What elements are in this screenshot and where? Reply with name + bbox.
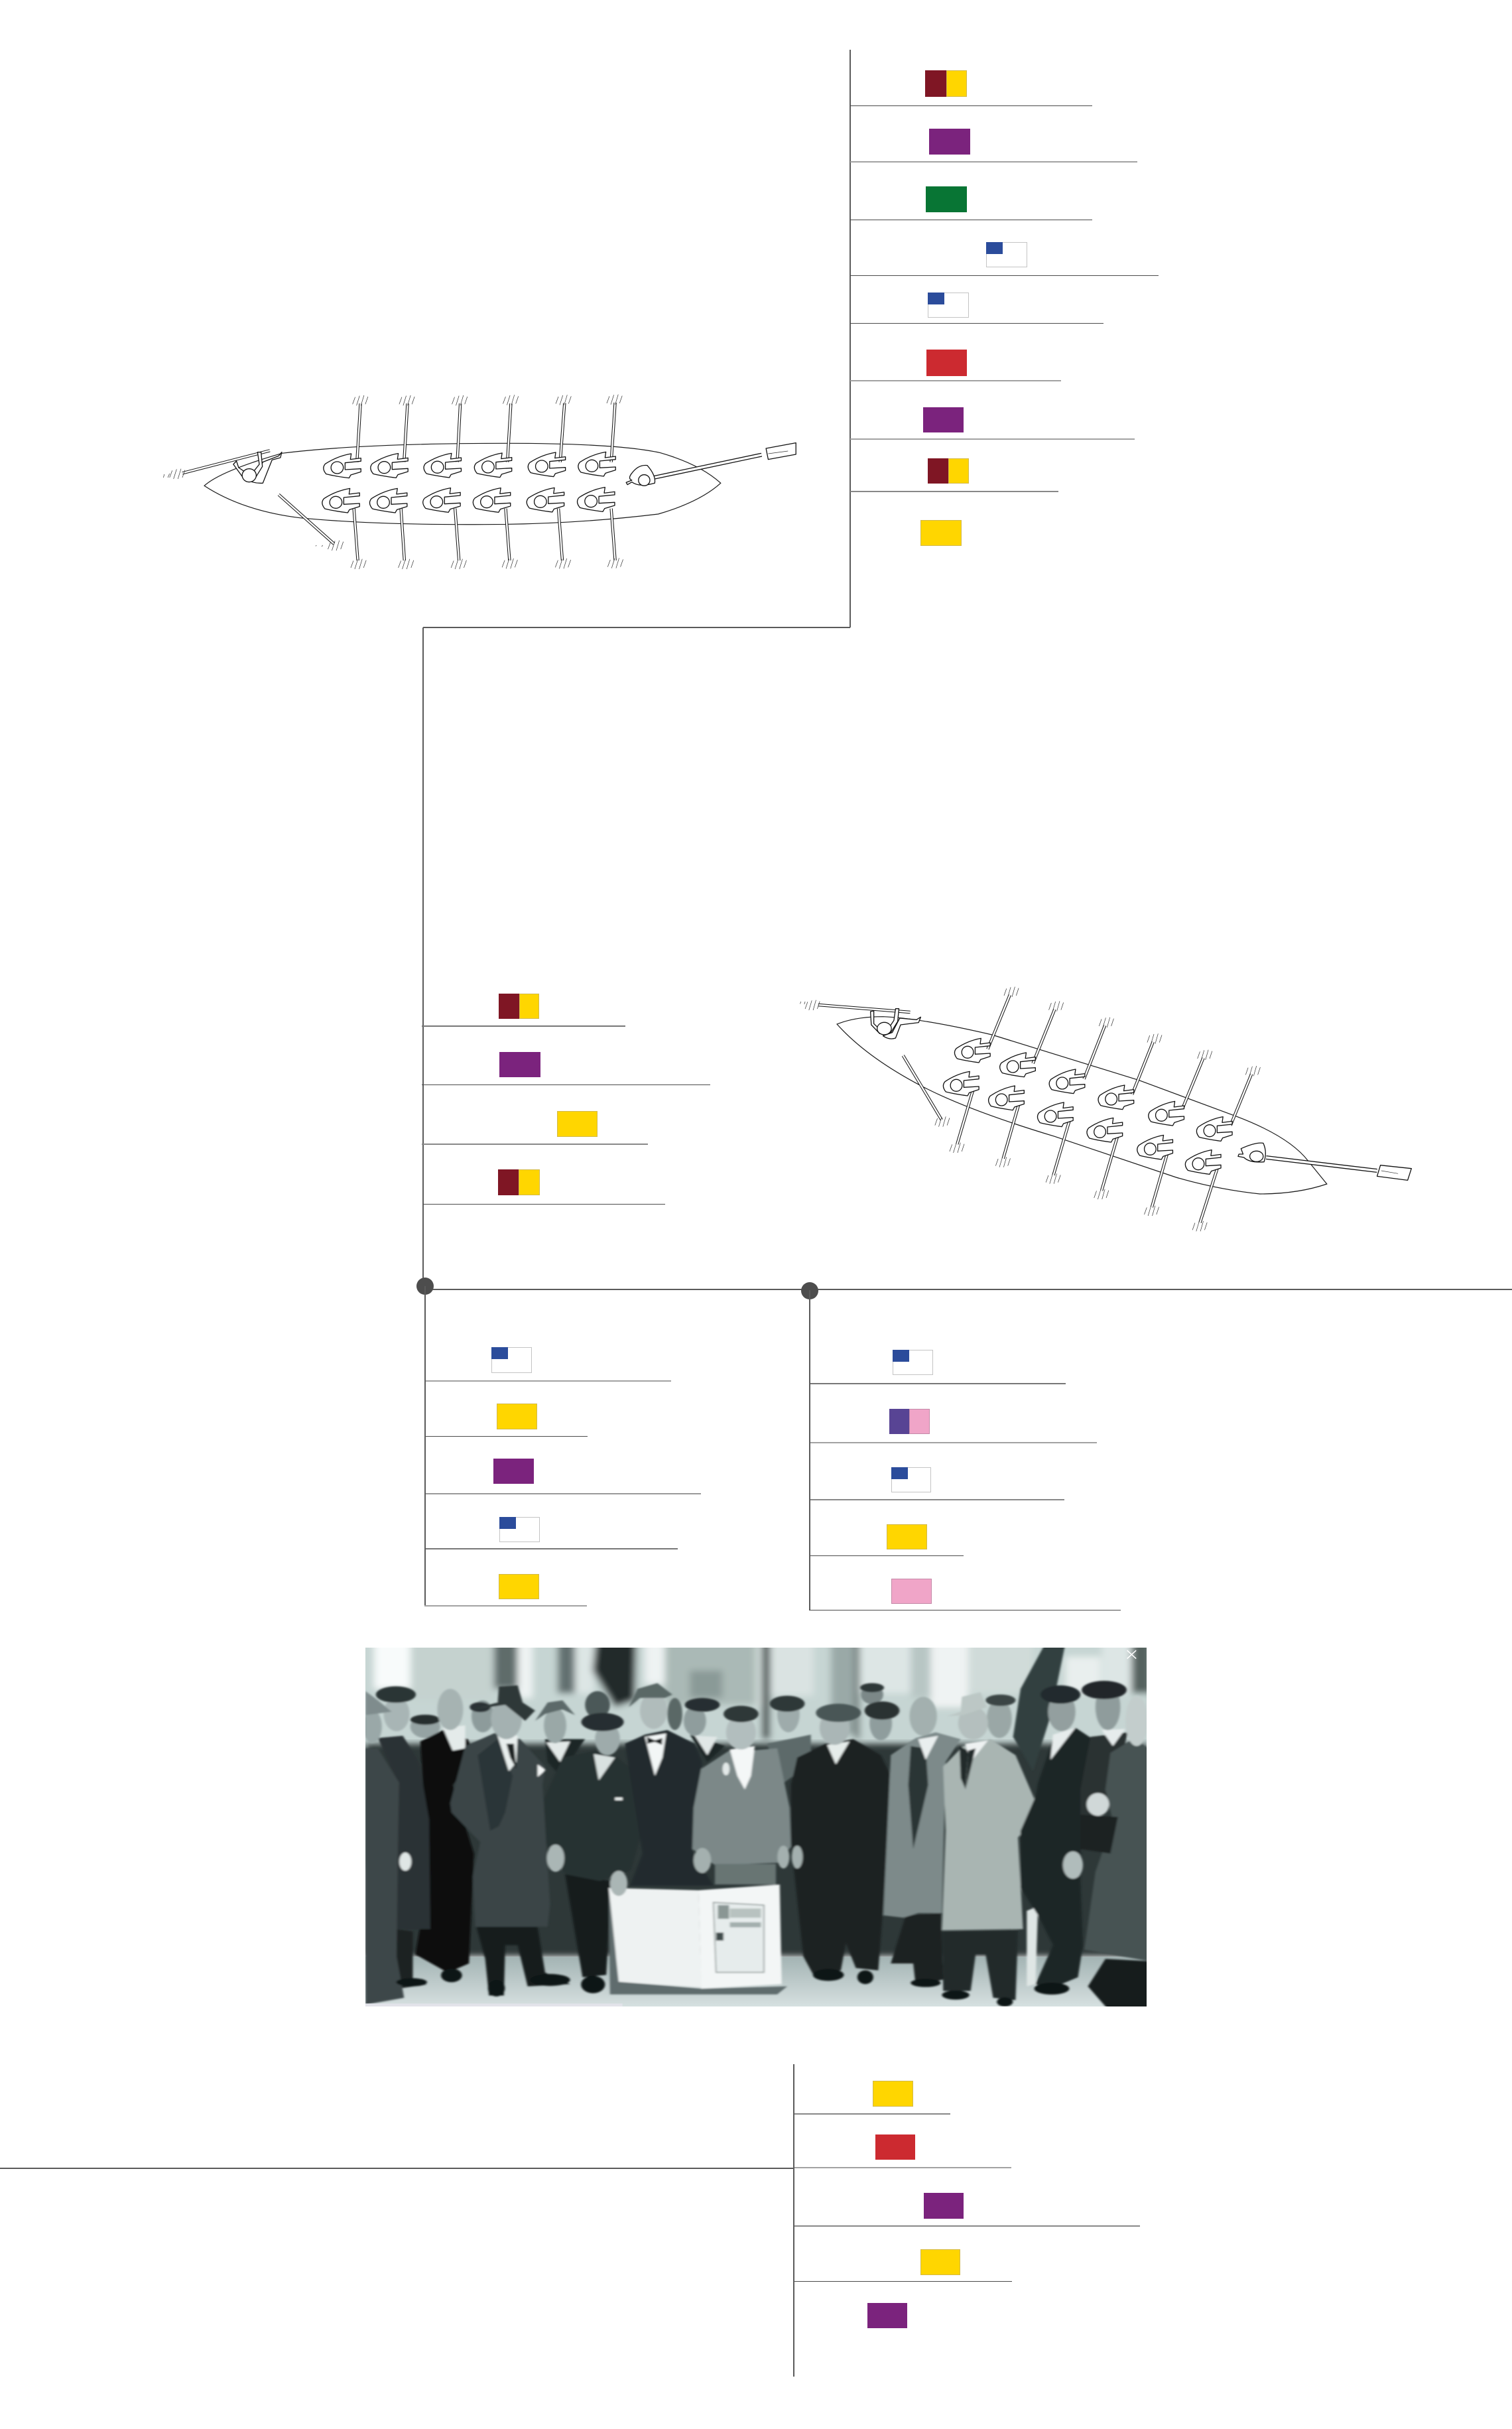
ground (365, 1957, 1147, 2006)
colour swatch: white with blue canton (491, 1347, 532, 1373)
colour swatch: yellow (920, 520, 962, 546)
colour swatch: pink (891, 1579, 932, 1604)
figure: man in dark jacket (565, 1874, 611, 1977)
oars: lower side (950, 1090, 1218, 1231)
row rule 5 (424, 1605, 587, 1607)
row rule 1 (850, 105, 1092, 106)
row rule 8 (850, 491, 1058, 492)
timeline marker dot 1 (416, 1278, 434, 1295)
close mark (1127, 1650, 1136, 1659)
colour swatch: yellow (499, 1574, 539, 1599)
panel: fifth crew list (793, 2064, 1145, 2377)
illustration: rowing boat at an angle (800, 987, 1412, 1231)
oars: lower side (351, 509, 623, 569)
colour swatch: yellow (873, 2081, 913, 2107)
panel: third crew list (424, 1286, 703, 1607)
bow figure with oar (163, 450, 282, 483)
colour swatch: yellow (497, 1404, 537, 1429)
row rule 1 (810, 1383, 1066, 1384)
colour swatch: green (926, 186, 967, 212)
stern figure with sweep oar (1238, 1143, 1411, 1180)
vertical axis (809, 1290, 810, 1610)
row rule 2 (850, 161, 1137, 163)
colour swatch: indigo and pink (889, 1409, 930, 1434)
panel: second crew list (422, 994, 710, 1205)
colour swatch: yellow (920, 2249, 960, 2275)
oars: upper side (987, 987, 1260, 1126)
row rule 3 (794, 2225, 1140, 2227)
bow figure with oar (800, 1000, 920, 1039)
figures: men in dark suits on the right (1021, 1681, 1149, 2009)
photo scene (355, 1638, 1157, 2009)
figure: tall man in bow tie (625, 1730, 714, 1886)
dark crowd backdrop (365, 1744, 1147, 1957)
row rule 4 (810, 1555, 964, 1556)
rowers: lower row (322, 488, 615, 513)
vertical axis (793, 2064, 794, 2377)
row rule 4 (850, 275, 1159, 276)
row rule 2 (422, 1084, 710, 1085)
illustration: rowing boat seen from above (163, 394, 796, 569)
row rule 6 (850, 380, 1061, 381)
historic group photograph (365, 1648, 1147, 2006)
panel: first crew list (850, 50, 1159, 627)
rowers: upper row (324, 452, 615, 478)
row rule 3 (426, 1493, 701, 1494)
colour swatch: purple (923, 407, 964, 432)
rowers: lower row (943, 1071, 1221, 1174)
colour swatch: purple (929, 129, 970, 155)
row rule 4 (426, 1548, 678, 1549)
back row heads (410, 1683, 1015, 1785)
colour swatch: maroon and yellow (498, 1169, 540, 1195)
colour swatch: purple (499, 1052, 540, 1077)
colour swatch: maroon and yellow (925, 70, 967, 97)
figure: dark suit, far left rear (415, 1730, 475, 1973)
colour swatch: white with blue canton (986, 242, 1027, 267)
tall dark banner (1013, 1643, 1066, 1771)
figure: man behind with collar (545, 1739, 585, 1776)
timeline marker dot 2 (801, 1282, 818, 1299)
oars: upper side (353, 395, 622, 462)
boat hull (204, 443, 721, 525)
colour swatch: red (926, 350, 967, 376)
figure: man in long overcoat (476, 1927, 570, 1995)
row rule 2 (426, 1436, 588, 1437)
colour swatch: white with blue canton (891, 1467, 931, 1492)
rowers: upper row (954, 1038, 1232, 1141)
colour swatch: purple (924, 2193, 964, 2219)
row rule 1 (422, 1025, 625, 1027)
row rule 7 (850, 438, 1135, 440)
connector: vertical axis down to first dot (422, 627, 424, 1286)
figure: man in dark overcoat (791, 1704, 892, 1975)
boat hull (837, 1017, 1327, 1194)
stern figure with sweep oar (626, 443, 796, 486)
row rule 5 (850, 323, 1103, 324)
colour swatch: red (875, 2134, 915, 2160)
loose oar (279, 495, 344, 551)
row rule 2 (810, 1442, 1097, 1443)
figure: man in pale jacket with medal (692, 1748, 791, 1865)
row rule 4 (423, 1204, 665, 1205)
vertical axis (850, 50, 851, 627)
caption strip (365, 2004, 623, 2006)
timeline: main horizontal axis (425, 1289, 1512, 1290)
shoes (396, 1969, 1069, 2006)
white pole (1027, 1906, 1038, 1987)
loose oar (903, 1055, 950, 1127)
figure: man in light double-breasted coat (942, 1692, 1035, 2000)
colour swatch: white with blue canton (499, 1517, 540, 1542)
connector: horizontal link between axes (423, 627, 850, 628)
row rule 1 (794, 2113, 950, 2115)
row rule 3 (810, 1499, 1064, 1500)
figure: man with beret, second from left (378, 1736, 430, 1929)
colour swatch: maroon and yellow (928, 458, 969, 484)
row rule 2 (794, 2167, 1011, 2168)
colour swatch: white with blue canton (928, 293, 969, 318)
colour swatch: purple (493, 1459, 534, 1484)
figure: man in grey overcoat (883, 1697, 961, 1987)
vertical axis (424, 1286, 426, 1606)
row rule 1 (426, 1380, 671, 1382)
sky, trees and banners (355, 1638, 1157, 1867)
figure: left edge man in hat (365, 1748, 404, 2004)
colour swatch: yellow (887, 1524, 927, 1549)
colour swatch: purple (867, 2303, 907, 2328)
colour swatch: white with blue canton (893, 1350, 933, 1375)
colour swatch: maroon and yellow (499, 994, 539, 1019)
panel: fourth crew list (809, 1290, 1124, 1611)
row rule 3 (422, 1144, 648, 1145)
timeline: lower horizontal axis from left edge (0, 2168, 794, 2169)
folder presented by the group (609, 1871, 787, 1995)
row rule 4 (794, 2281, 1012, 2282)
colour swatch: yellow (557, 1111, 598, 1137)
